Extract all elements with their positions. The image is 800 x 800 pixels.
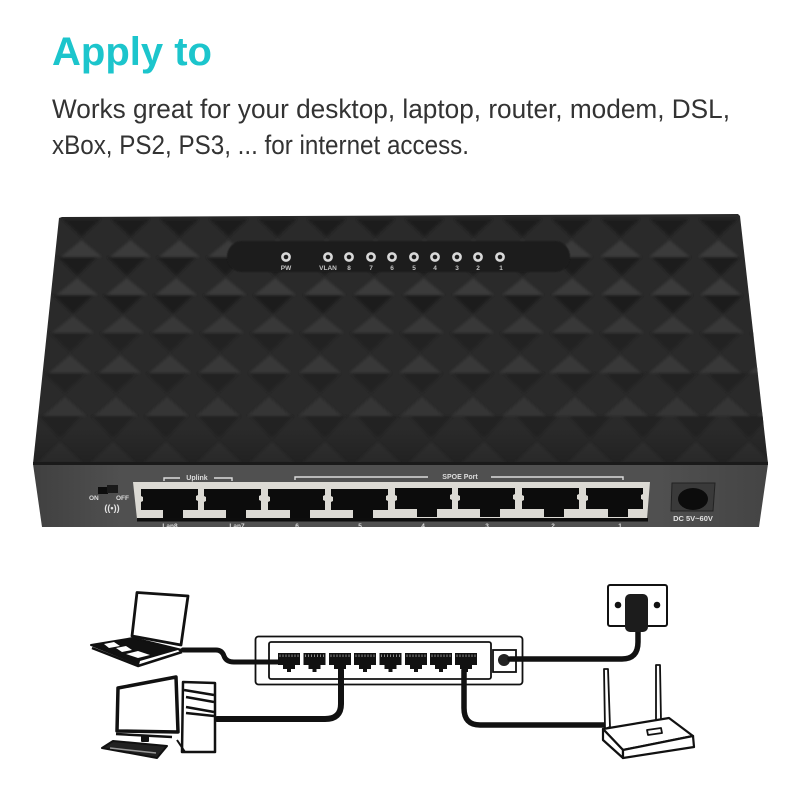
icon: laptop	[91, 592, 188, 666]
ethernet port strip: Lan7	[229, 523, 245, 530]
uplink and SPOE labels: SPOE Port	[442, 474, 478, 481]
network switch device photo	[20, 210, 780, 530]
LED indicator panel	[227, 241, 570, 272]
ethernet port strip: 4	[421, 523, 425, 530]
switch front panel	[33, 464, 768, 527]
DC power jack: DC 5V~60V	[673, 514, 713, 523]
switch top panel with diamond texture	[20, 210, 780, 466]
DC power jack	[671, 483, 715, 523]
ethernet port strip: 6	[295, 523, 299, 530]
LED indicator panel: 8	[347, 265, 351, 272]
ethernet port strip	[133, 482, 650, 530]
ethernet port strip: 3	[485, 523, 489, 530]
ethernet port strip: 2	[551, 523, 555, 530]
description text	[52, 94, 730, 160]
title: Apply to	[52, 30, 212, 74]
LED indicator panel: 7	[369, 265, 373, 272]
LED indicator panel: PW	[281, 265, 292, 272]
power switch and wifi label: OFF	[116, 495, 129, 502]
switch outline	[256, 636, 522, 684]
description text: Works great for your desktop, laptop, router, modem, DSL,	[52, 94, 730, 124]
ethernet port strip: 1	[618, 523, 622, 530]
uplink and SPOE labels	[164, 474, 623, 482]
icon: desktop computer	[102, 677, 215, 758]
cables	[183, 632, 638, 725]
ethernet port strip: Lan8	[162, 523, 178, 530]
description text: xBox, PS2, PS3, ... for internet access.	[52, 130, 469, 160]
LED indicator panel: VLAN	[319, 265, 337, 272]
icon: wall socket and power plug	[608, 585, 667, 632]
ethernet port strip: 5	[358, 523, 362, 530]
LED indicator panel: 6	[390, 265, 394, 272]
LED indicator panel: 1	[499, 265, 503, 272]
power switch and wifi label: ON	[89, 495, 99, 502]
LED indicator panel: 4	[433, 265, 437, 272]
uplink and SPOE labels: Uplink	[186, 475, 208, 482]
power switch and wifi label: ((•))	[104, 503, 120, 513]
LED indicator panel: 5	[412, 265, 416, 272]
connection diagram	[91, 585, 694, 758]
LED indicator panel: 3	[455, 265, 459, 272]
icon: wireless router	[603, 665, 694, 758]
power switch and wifi label	[89, 485, 129, 513]
LED indicator panel: 2	[476, 265, 480, 272]
